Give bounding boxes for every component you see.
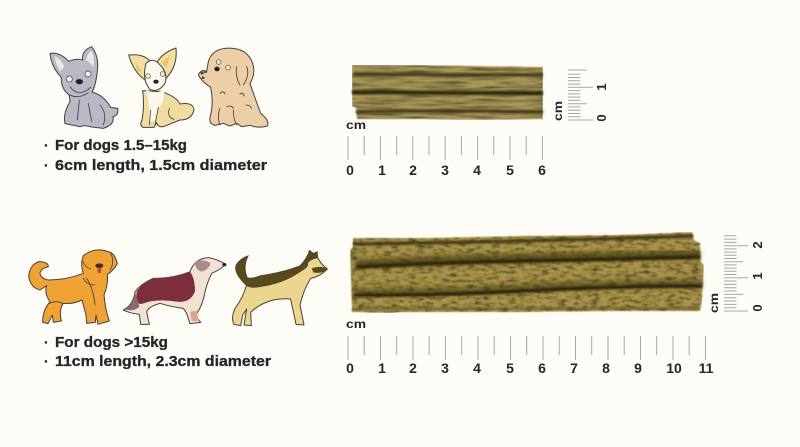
size text: small dogs: 6cm length, 1.5cm diameter xyxy=(55,158,267,174)
size text: large dogs: · xyxy=(44,353,49,369)
ruler: small stick length 6cm: 0 xyxy=(346,162,354,178)
ruler: large stick length 11cm: 4 xyxy=(473,360,481,376)
size text: large dogs xyxy=(44,334,271,370)
ruler: large stick length 11cm xyxy=(346,319,714,376)
ruler: large stick length 11cm: 0 xyxy=(346,360,354,376)
size text: small dogs: · xyxy=(44,157,49,173)
ruler: small stick length 6cm: cm xyxy=(346,120,366,132)
ruler: large stick length 11cm: 5 xyxy=(506,360,514,376)
icon: apricot poodle xyxy=(198,48,268,127)
ruler: large stick diameter 2.3cm: 1 xyxy=(750,272,765,280)
icon: maroon collie xyxy=(123,258,226,324)
icon: cream chihuahua xyxy=(129,48,194,127)
ruler: large stick length 11cm: 8 xyxy=(602,360,610,376)
ruler: small stick length 6cm: 5 xyxy=(506,162,514,178)
icon: grey french bulldog xyxy=(50,47,118,128)
panel: small dogs section xyxy=(44,47,609,178)
ruler: large stick length 11cm: 9 xyxy=(634,360,642,376)
ruler: large stick length 11cm: 2 xyxy=(409,360,417,376)
ruler: small stick length 6cm: 3 xyxy=(441,162,449,178)
ruler: small stick diameter 1.5cm: 1 xyxy=(594,83,609,91)
ruler: small stick length 6cm: 4 xyxy=(473,162,481,178)
size text: large dogs: For dogs >15kg xyxy=(55,335,168,351)
size text: large dogs: · xyxy=(44,334,49,350)
size text: small dogs xyxy=(44,137,267,174)
small dog illustrations xyxy=(50,47,268,128)
ruler: large stick length 11cm: 11 xyxy=(699,360,714,376)
ruler: large stick diameter 2.3cm: 2 xyxy=(750,241,765,249)
ruler: large stick length 11cm: 7 xyxy=(570,360,578,376)
panel: large dogs section xyxy=(29,232,765,376)
size text: small dogs: · xyxy=(44,137,49,153)
ruler: small stick diameter 1.5cm: cm xyxy=(553,101,565,121)
ruler: small stick length 6cm: 6 xyxy=(538,162,546,178)
ruler: large stick length 11cm: cm xyxy=(346,319,366,331)
ruler: large stick diameter 2.3cm xyxy=(709,236,765,313)
ruler: large stick length 11cm: 1 xyxy=(378,360,386,376)
icon: german shepherd xyxy=(233,250,328,326)
photo: small chew stick xyxy=(352,65,543,120)
size text: large dogs: 11cm length, 2.3cm diameter xyxy=(55,354,271,370)
ruler: small stick diameter 1.5cm: 0 xyxy=(594,114,609,122)
ruler: small stick diameter 1.5cm xyxy=(553,70,609,122)
ruler: large stick diameter 2.3cm: cm xyxy=(709,293,721,313)
ruler: large stick length 11cm: 3 xyxy=(441,360,449,376)
ruler: large stick length 11cm: 6 xyxy=(538,360,546,376)
ruler: small stick length 6cm: 1 xyxy=(378,162,386,178)
ruler: large stick length 11cm: 10 xyxy=(666,360,682,376)
ruler: large stick diameter 2.3cm: 0 xyxy=(750,304,765,312)
icon: golden retriever xyxy=(29,250,117,324)
ruler: small stick length 6cm xyxy=(346,120,546,178)
ruler: small stick length 6cm: 2 xyxy=(409,162,417,178)
photo: large chew stick xyxy=(350,232,704,313)
large dog illustrations xyxy=(29,250,328,326)
size text: small dogs: For dogs 1.5–15kg xyxy=(55,138,187,154)
